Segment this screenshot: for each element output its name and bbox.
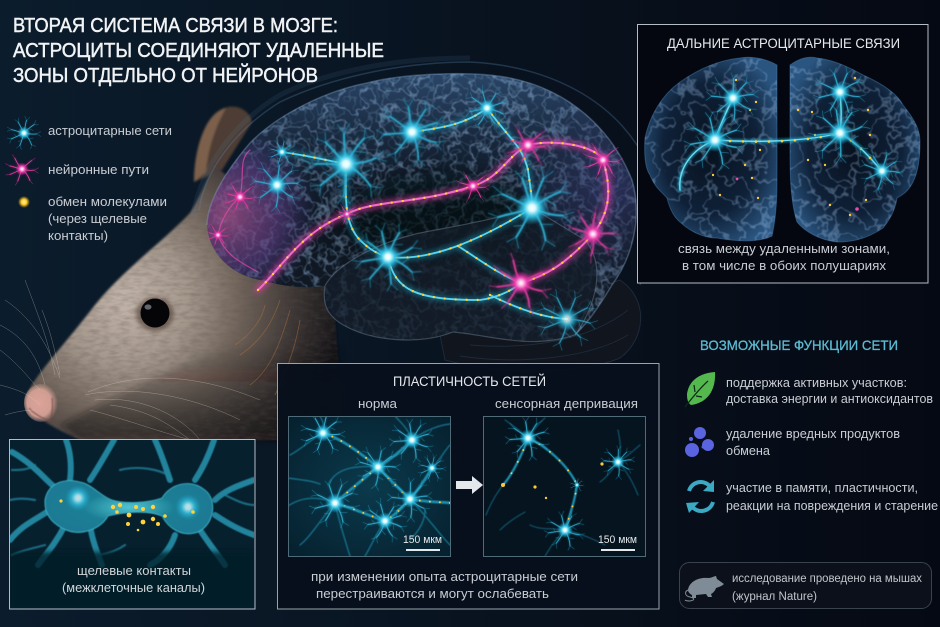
neuron pathways and astrocyte links: [218, 108, 608, 319]
icon: leaf: [685, 372, 715, 407]
brain fill: [207, 74, 636, 342]
panel caption: (межклеточные каналы): [62, 580, 205, 595]
panel: long-range astrocyte links: [638, 24, 928, 283]
functions heading: ВОЗМОЖНЫЕ ФУНКЦИИ СЕТИ: [700, 337, 898, 353]
scale bar: [601, 549, 635, 551]
links: [486, 418, 640, 556]
ear of mouse: [194, 107, 252, 182]
astrocytes: [241, 78, 609, 361]
icon: cycle arrows: [686, 480, 714, 513]
whiskers: [0, 280, 260, 445]
pink frontal wash: [207, 74, 636, 342]
title: АСТРОЦИТЫ СОЕДИНЯЮТ УДАЛЕННЫЕ: [13, 39, 384, 62]
legend label: molecule exchange: [48, 194, 167, 243]
title: ЗОНЫ ОТДЕЛЬНО ОТ НЕЙРОНОВ: [13, 63, 318, 87]
title: ВТОРАЯ СИСТЕМА СВЯЗИ В МОЗГЕ:: [13, 14, 338, 37]
note text: исследование проведено на мышах: [732, 573, 922, 585]
note text: [732, 573, 922, 603]
fur texture: [50, 222, 338, 440]
temporal lobe: [324, 208, 597, 342]
study note: [680, 562, 932, 608]
panel caption: [678, 241, 890, 273]
panel: gap junctions: [10, 440, 255, 609]
brain rim: [207, 74, 636, 335]
function text: поддержка активных участков:: [726, 376, 907, 390]
legend label: molecule exchange: контакты): [48, 228, 108, 243]
two hemispheres: [640, 55, 925, 245]
links: [288, 416, 452, 556]
two connected astrocytes: [10, 440, 254, 568]
legend label: molecule exchange: (через щелевые: [48, 211, 147, 226]
panel heading: ДАЛЬНИЕ АСТРОЦИТАРНЫЕ СВЯЗИ: [667, 36, 900, 51]
cell bodies and bridge: [45, 481, 213, 534]
nose: [24, 384, 58, 422]
arrow: [456, 476, 483, 494]
fine sulci texture: [207, 74, 636, 334]
title: [13, 14, 384, 87]
function text: участие в памяти, пластичности,: [726, 481, 918, 495]
mouse head: [0, 160, 350, 445]
panel caption: связь между удаленными зонами,: [678, 241, 890, 256]
jaw shadow: [60, 340, 345, 440]
pink frontal branches: [218, 150, 258, 272]
hemisphere astrocytes: [678, 62, 913, 202]
legend label: astrocyte networks: астроцитарные сети: [48, 123, 172, 138]
label: norm: норма: [358, 396, 398, 411]
icon: bubbles: [685, 427, 714, 457]
legend icon: molecule: [18, 196, 30, 208]
scale label: 150 мкм: [598, 534, 637, 546]
gyri texture: [207, 74, 636, 342]
eye: [136, 297, 174, 331]
cyan glow: [282, 108, 567, 319]
brain illustration: [200, 70, 650, 355]
icon: mouse silhouette: [685, 576, 724, 601]
pink glow: [258, 143, 608, 290]
panel caption: перестраиваются и могут ослабевать: [316, 586, 549, 601]
brain halo: [193, 58, 654, 285]
micrograph: normal: [288, 411, 452, 556]
panel: network plasticity: [278, 364, 659, 609]
function text: реакции на повреждения и старение: [726, 499, 938, 513]
panel heading: ПЛАСТИЧНОСТЬ СЕТЕЙ: [393, 374, 546, 389]
panel caption: в том числе в обоих полушариях: [682, 258, 887, 273]
label: sensory deprivation: сенсорная депривация: [495, 396, 638, 411]
function text: доставка энергии и антиоксидантов: [726, 392, 933, 406]
note text: (журнал Nature): [732, 591, 817, 603]
legend: [5, 116, 172, 243]
cyan line: [282, 108, 567, 319]
legend icon: neuron: [5, 155, 39, 185]
cerebellum and brain stem: [440, 280, 641, 371]
nostril: [29, 398, 52, 421]
panel caption: [62, 563, 205, 595]
scattered molecule dots: [712, 77, 871, 216]
function text: [726, 427, 900, 458]
orange nerve strands: [235, 300, 300, 395]
legend label: molecule exchange: обмен молекулами: [48, 194, 167, 209]
scale bar: [406, 549, 440, 551]
panel caption: щелевые контакты: [77, 563, 191, 578]
molecule dots: [258, 108, 608, 319]
panel caption: при изменении опыта астроцитарные сети: [311, 569, 578, 584]
inter-hemisphere link: [680, 92, 882, 190]
function text: [726, 481, 938, 513]
pink line: [258, 143, 608, 290]
central shadow: [345, 172, 535, 268]
panel caption: [311, 569, 578, 601]
right wash: [207, 74, 636, 342]
function text: обмена: [726, 444, 770, 458]
gap junction molecules: [59, 499, 195, 531]
micrograph: sensory deprivation: [484, 410, 646, 556]
scale label: 150 мкм: [403, 534, 442, 546]
function text: [726, 376, 933, 406]
function: waste removal: [685, 427, 900, 458]
legend label: neural pathways: нейронные пути: [48, 162, 149, 177]
lower fade behind caption: [10, 549, 229, 569]
function text: удаление вредных продуктов: [726, 427, 900, 441]
function: support active areas: [685, 372, 933, 407]
function: memory and plasticity: [686, 480, 938, 513]
pink neurons: [205, 126, 628, 320]
legend icon: astrocyte: [7, 116, 41, 150]
